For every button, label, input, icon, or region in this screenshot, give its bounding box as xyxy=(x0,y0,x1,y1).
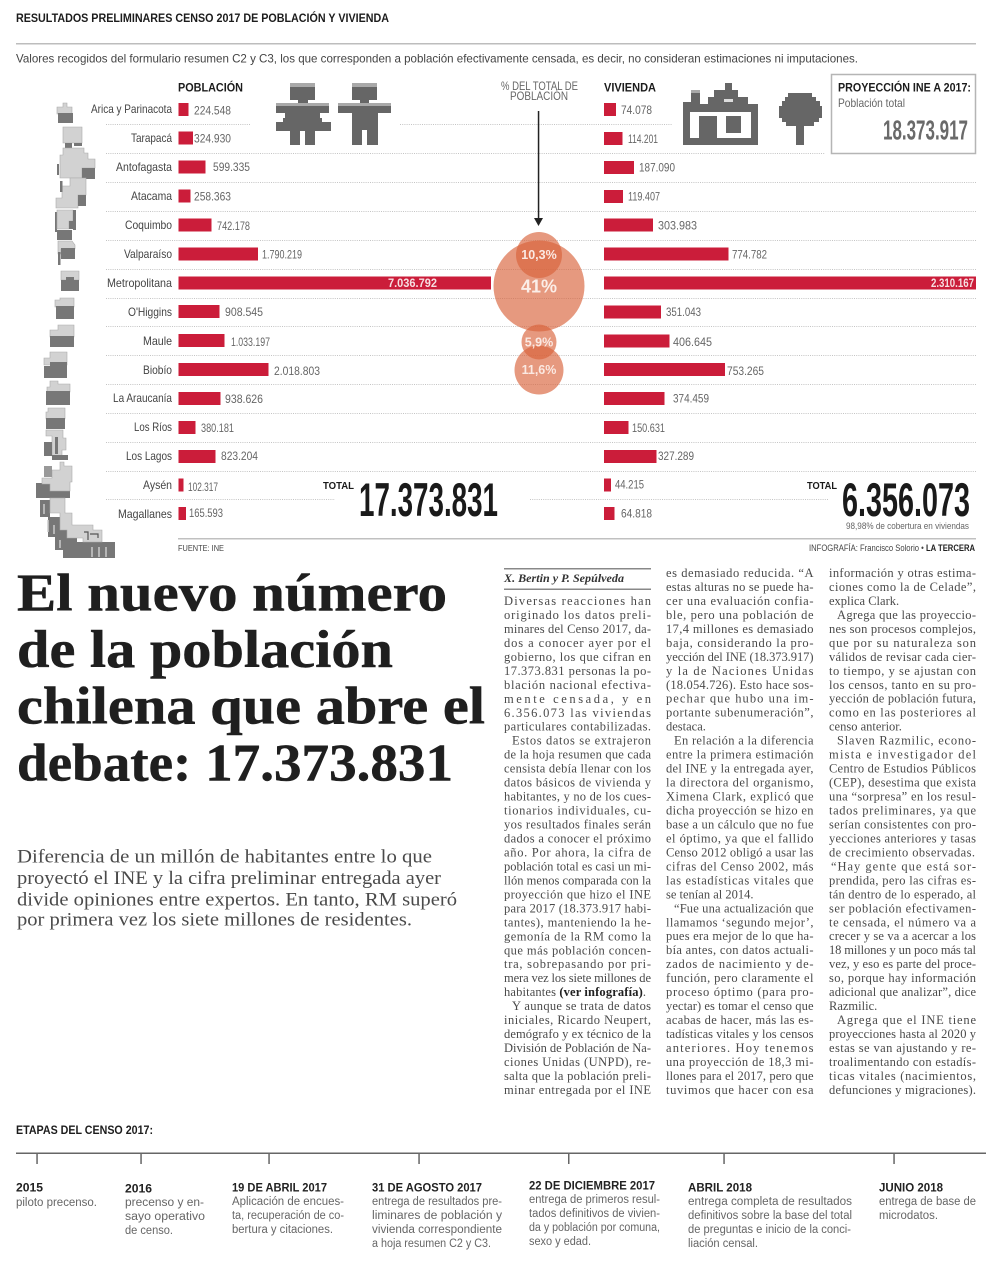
row: vivienda Los Lagos: 327.289 xyxy=(658,449,694,463)
timeline item: abril 2018: entrega completa de resultados xyxy=(688,1196,852,1208)
row: vivienda Antofagasta xyxy=(604,160,675,174)
row: Aysén: 102.317 xyxy=(188,480,218,494)
article column 1: 6.356.073 las viviendas xyxy=(504,706,651,720)
article column 1: censista debía llenar con los xyxy=(504,762,651,776)
article column 1: originado los datos preli- xyxy=(504,608,651,622)
row: Los Lagos: Los Lagos xyxy=(126,449,172,463)
row: Maule: 1.033.197 xyxy=(231,335,270,349)
deck xyxy=(17,848,457,931)
row: vivienda Coquimbo xyxy=(604,218,697,232)
top heading: RESULTADOS PRELIMINARES CENSO 2017 DE POBLACIÓN Y VIVIENDA xyxy=(16,12,389,25)
timeline item: 2016: sayo operativo xyxy=(125,1211,205,1223)
row: vivienda Arica y Parinacota xyxy=(604,103,652,117)
timeline item: junio 2018: microdatos. xyxy=(879,1210,938,1222)
deck: Diferencia de un millón de habitantes entre lo que xyxy=(17,848,432,868)
headline: debate: 17.373.831 xyxy=(17,734,453,792)
article column 1: dados a conocer el próximo xyxy=(504,832,651,846)
timeline item: junio 2018: entrega de base de xyxy=(879,1196,976,1208)
box: INE projection xyxy=(832,74,976,154)
article column 1: habitantes, y no de los cues- xyxy=(504,790,651,804)
timeline item: 22 de diciembre 2017: entrega de primeros resul- xyxy=(529,1194,660,1206)
timeline item: 31 de agosto 2017: liminares de población y xyxy=(372,1210,502,1222)
row: Metropolitana: 7.036.792 xyxy=(388,278,437,290)
icon: tree xyxy=(779,93,822,145)
row: vivienda Biobío xyxy=(604,363,764,378)
total housing: 98,98% de cobertura en viviendas xyxy=(846,521,969,531)
article column 1: mera vez los siete millones de xyxy=(504,971,651,985)
article column 1: demógrafo y ex técnico de la xyxy=(504,1027,651,1041)
article column 3: adicional que analizar”, dice xyxy=(829,985,976,999)
headline xyxy=(17,565,485,792)
timeline item: 22 de diciembre 2017: tados definitivos de vivien- xyxy=(529,1208,660,1220)
headline: chilena que abre el xyxy=(17,677,485,735)
article column 3: Slaven Razmilic, econo- xyxy=(837,734,976,748)
article column 1: División de Población de Na- xyxy=(504,1041,651,1055)
article column 3: válidos de revisar cada cier- xyxy=(829,650,976,664)
article column 3: de crecimiento observadas. xyxy=(829,845,975,859)
deck: divide opiniones entre expertos. En tanto, RM superó xyxy=(17,890,457,910)
timeline axis xyxy=(16,1152,986,1164)
article column 2: dicha proyección se hizo en xyxy=(666,804,814,818)
timeline item: 22 de diciembre 2017 xyxy=(529,1178,660,1248)
article column 1: particulares contabilizadas. xyxy=(504,720,651,734)
row: vivienda Atacama xyxy=(604,190,660,204)
row: Antofagasta: 599.335 xyxy=(213,160,250,174)
row: Valparaíso: Valparaíso xyxy=(124,247,172,261)
article column 3: te censada, el número va a xyxy=(829,915,976,929)
row: Arica y Parinacota: 224.548 xyxy=(194,104,231,118)
timeline item: junio 2018: JUNIO 2018 xyxy=(879,1180,943,1194)
article column 1: tra, sobrepasando por pri- xyxy=(504,957,651,971)
article column 2: “Fue una actualización que xyxy=(674,901,814,915)
row: vivienda O'Higgins: 351.043 xyxy=(666,305,701,319)
timeline item: abril 2018: definitivos sobre la base del total xyxy=(688,1210,852,1222)
row: Aysén xyxy=(143,478,218,494)
timeline item: 22 de diciembre 2017: da y población por comuna, xyxy=(529,1222,660,1234)
timeline item: 22 de diciembre 2017: 22 DE DICIEMBRE 2017 xyxy=(529,1178,655,1192)
timeline item: junio 2018 xyxy=(879,1180,976,1222)
row: vivienda Magallanes xyxy=(604,506,652,520)
timeline item: 22 de diciembre 2017: sexo y edad. xyxy=(529,1236,591,1248)
article column 2: zados de nacimiento y de- xyxy=(666,957,814,971)
row: Biobío: Biobío xyxy=(143,363,172,377)
article column 2: En relación a la diferencia xyxy=(674,734,814,748)
timeline item: abril 2018: de preguntas e inicio de la conci- xyxy=(688,1224,851,1236)
label: percent of total population: POBLACIÓN xyxy=(510,90,568,103)
article column 1: yos resultados finales serán xyxy=(504,818,652,832)
row: vivienda Metropolitana xyxy=(604,276,976,290)
article column 2: acabas de hacer, más las es- xyxy=(666,1013,814,1027)
article column 1: ciones Unidas (UNPD), re- xyxy=(504,1055,651,1069)
article column 3: defunciones y migraciones). xyxy=(829,1083,976,1097)
credit: INFOGRAFÍA: Francisco Solorio • LA TERCERA xyxy=(809,543,975,553)
box: INE projection: PROYECCIÓN INE A 2017: xyxy=(838,82,971,94)
timeline item: 19 de abril 2017: 19 DE ABRIL 2017 xyxy=(232,1180,327,1194)
row: Arica y Parinacota xyxy=(91,102,231,118)
intro text: Valores recogidos del formulario resumen C2 y C3, los que corresponden a población efectivamente censada, es decir, no consideran estimaciones ni imputaciones. xyxy=(16,52,858,66)
row: vivienda Atacama: 119.407 xyxy=(628,190,660,204)
article column 3: troalimentando con estadís- xyxy=(829,1055,976,1069)
bubbles: percent of population: 41% xyxy=(521,276,557,296)
article column 3: (CEP), desestima que exista xyxy=(829,776,976,790)
article column 2: portante subenumeración”, xyxy=(666,706,814,720)
article column 3: que por su naturaleza son xyxy=(829,636,977,650)
row: La Araucanía xyxy=(113,391,263,406)
article column 2: Censo 2012 obligó a usar las xyxy=(666,845,814,859)
row: Los Ríos: Los Ríos xyxy=(134,420,172,434)
timeline item: 19 de abril 2017 xyxy=(232,1180,344,1236)
article column 2: función, pero claramente el xyxy=(666,971,814,985)
row: Atacama: Atacama xyxy=(131,189,172,203)
timeline item: 31 de agosto 2017: 31 DE AGOSTO 2017 xyxy=(372,1180,482,1194)
row: vivienda Coquimbo: 303.983 xyxy=(658,218,697,232)
bubbles: percent of population: 5,9% xyxy=(525,336,553,350)
article column 1: tionarios individuales, cu- xyxy=(504,804,651,818)
row: vivienda O'Higgins xyxy=(604,305,701,319)
timeline item: 2016: de censo. xyxy=(125,1225,173,1237)
timeline item: 2016 xyxy=(125,1182,205,1237)
timeline item: 31 de agosto 2017: vivienda correspondiente xyxy=(372,1224,502,1236)
row: Maule: Maule xyxy=(143,334,172,348)
timeline item: abril 2018: ABRIL 2018 xyxy=(688,1180,752,1194)
row: Coquimbo: Coquimbo xyxy=(125,218,172,232)
row: vivienda Magallanes: 64.818 xyxy=(621,506,652,520)
row: Magallanes: Magallanes xyxy=(118,507,172,521)
map of Chile by regions xyxy=(36,103,115,558)
article column 3: nes son procesos complejos, xyxy=(829,622,976,636)
icon: house xyxy=(683,83,758,145)
row: vivienda Maule xyxy=(604,334,712,349)
article column 1: 17.373.831 personas la po- xyxy=(504,664,651,678)
article column 3: explica Clark. xyxy=(829,594,899,608)
article column 2: bía antes, con datos actuali- xyxy=(666,943,814,957)
timeline item: 2015: 2015 xyxy=(16,1180,43,1194)
row: Los Ríos: 380.181 xyxy=(201,421,234,435)
article column 3: proyecciones hasta al 2020 y xyxy=(829,1027,977,1041)
icon: man figure xyxy=(338,83,391,145)
article column 3: tán dentro de lo esperado, al xyxy=(829,887,977,901)
article column 1 xyxy=(504,594,652,1097)
total population: 17.373.831 xyxy=(359,474,498,527)
row: Magallanes xyxy=(118,506,223,521)
article column 2: entre la primera estimación xyxy=(666,748,814,762)
article column 2: pues era mejor de lo que ha- xyxy=(666,929,814,943)
icon: woman figure xyxy=(276,83,331,145)
row: Biobío xyxy=(143,363,320,378)
label: percent of total population: % DEL TOTAL DE xyxy=(501,81,578,93)
article column 2: llamamos ‘segundo mejor’, xyxy=(666,915,814,929)
total housing xyxy=(807,474,970,531)
article column 1: para 2017 (18.373.917 habi- xyxy=(504,901,651,915)
article column 2: (18.054.726). Esto hace sos- xyxy=(666,678,814,692)
article column 2: la directora del organismo, xyxy=(666,776,814,790)
timeline item: 2015 xyxy=(16,1180,97,1209)
article column 3: tados preliminares, ya que xyxy=(829,804,976,818)
article column 3: yección de población futura, xyxy=(829,692,976,706)
row: O'Higgins xyxy=(128,305,263,319)
article column 2: cifras del Censo 2002, más xyxy=(666,859,814,873)
row: Coquimbo xyxy=(125,218,250,233)
article column 2: es demasiado reducida. “A xyxy=(666,566,814,580)
row: vivienda Tarapacá: 114.201 xyxy=(628,132,658,146)
timeline item: abril 2018: liación censal. xyxy=(688,1238,758,1250)
row: Aysén: Aysén xyxy=(143,478,172,492)
row: vivienda Arica y Parinacota: 74.078 xyxy=(621,103,652,117)
article column 2: el óptimo, ya que el fallido xyxy=(666,831,814,845)
row: Antofagasta: Antofagasta xyxy=(116,160,172,174)
row: vivienda Aysén xyxy=(604,478,644,492)
row: Arica y Parinacota: Arica y Parinacota xyxy=(91,102,172,116)
column heading: vivienda: VIVIENDA xyxy=(604,82,656,94)
row: vivienda Metropolitana: 2.310.167 xyxy=(931,278,974,290)
article column 3: ser población efectivamen- xyxy=(829,901,976,915)
article column 2: se tenían al 2014. xyxy=(666,887,753,901)
article column 3: crecer y se va a acercar a los xyxy=(829,929,976,943)
article column 3: vez, y eso es parte del proce- xyxy=(829,957,976,971)
article column 1: gemonía de la RM como la xyxy=(504,929,651,943)
row: Atacama xyxy=(131,189,231,204)
article column 2: y la de Naciones Unidas xyxy=(666,664,814,678)
article column 1: Diversas reacciones han xyxy=(504,594,652,608)
article column 1: habitantes (ver infografía). xyxy=(504,985,646,999)
article column 3: mista e investigador del xyxy=(829,748,977,762)
article column 2: 17,4 millones es demasiado xyxy=(666,622,814,636)
article column 3: Razmilic. xyxy=(829,999,877,1013)
row: Valparaíso xyxy=(124,247,302,262)
article column 2: estas alturas no se puede ha- xyxy=(666,580,814,594)
bubbles: percent of population: 10,3% xyxy=(521,248,557,262)
column heading: población: POBLACIÓN xyxy=(178,82,243,94)
arrow to bubbles xyxy=(534,111,543,226)
timeline heading: ETAPAS DEL CENSO 2017: xyxy=(16,1125,153,1137)
article column 1: Estos datos se extrajeron xyxy=(512,734,652,748)
article column 2: las estadísticas vitales que xyxy=(666,873,814,887)
timeline item: 2016: 2016 xyxy=(125,1182,152,1196)
timeline item: abril 2018 xyxy=(688,1180,852,1250)
article column 3: yecciones anteriores y tasas xyxy=(829,831,976,845)
article column 1: gobierno, los que cifran en xyxy=(504,650,652,664)
article column 2: Ximena Clark, explicó que xyxy=(666,790,814,804)
article column 2: anteriores. Hoy tenemos xyxy=(666,1041,814,1055)
article column 1: año. Por ahora, la cifra de xyxy=(504,846,651,860)
row: Antofagasta xyxy=(116,160,250,174)
total population: TOTAL xyxy=(323,480,355,492)
article column 1: minar entregada por el INE xyxy=(504,1083,651,1097)
timeline item: 31 de agosto 2017 xyxy=(372,1180,502,1250)
row: vivienda La Araucanía: 374.459 xyxy=(673,392,709,406)
row: Metropolitana xyxy=(107,276,491,290)
deck: por primera vez los siete millones de residentes. xyxy=(17,911,412,931)
article column 3: los censos, tanto en su pro- xyxy=(829,678,976,692)
article column 2: base a un cálculo que no fue xyxy=(666,818,814,832)
row: vivienda Valparaíso xyxy=(604,248,767,262)
article column 3: censo anterior. xyxy=(829,720,902,734)
row: vivienda Valparaíso: 774.782 xyxy=(732,248,767,262)
timeline item: 19 de abril 2017: ta, recuperación de co- xyxy=(232,1210,344,1222)
article column 3: 18 millones y un poco más tal xyxy=(829,943,977,957)
article column 1: de la hoja resumen que cada xyxy=(504,748,651,762)
article column 1: blación nacional efectiva- xyxy=(504,678,651,692)
box: INE projection: Población total xyxy=(838,96,905,110)
article column 3: to tiempo, y se ajustan con xyxy=(829,664,977,678)
article column 3: ciones como la de Celade”, xyxy=(829,580,976,594)
label: percent of total population xyxy=(501,81,578,103)
article column 2: baja, considerando la pro- xyxy=(666,636,814,650)
housing bars by region xyxy=(604,103,976,520)
article column 3: prendida, pero las cifras es- xyxy=(829,873,976,887)
article column 2: yectar) es tomar el censo que xyxy=(666,999,814,1013)
row: Biobío: 2.018.803 xyxy=(274,364,320,378)
timeline item: 31 de agosto 2017: a hoja resumen C2 y C3. xyxy=(372,1238,491,1250)
article column 3: información y otras estima- xyxy=(829,566,976,580)
article column 2: cer una evaluación confia- xyxy=(666,594,814,608)
article column 3: ticas vitales (nacimientos, xyxy=(829,1069,976,1083)
article column 2 xyxy=(666,566,814,1097)
row: vivienda Los Ríos xyxy=(604,421,665,435)
article column 1: población total es casi un mi- xyxy=(504,859,651,873)
row: vivienda Maule: 406.645 xyxy=(673,335,712,349)
timeline item: 2015: piloto precenso. xyxy=(16,1197,97,1209)
row: Tarapacá xyxy=(131,131,231,146)
row: Metropolitana: Metropolitana xyxy=(107,276,172,290)
row: vivienda Antofagasta: 187.090 xyxy=(639,160,675,174)
row: vivienda Biobío: 753.265 xyxy=(727,364,764,378)
row: Coquimbo: 742.178 xyxy=(217,219,250,233)
timeline item: 19 de abril 2017: bertura y citaciones. xyxy=(232,1224,333,1236)
timeline item: 31 de agosto 2017: entrega de resultados pre- xyxy=(372,1196,502,1208)
byline: X. Bertin y P. Sepúlveda xyxy=(503,571,624,585)
article column 2: yección del INE (18.373.917) xyxy=(666,650,814,664)
article column 1: mente censada, y en xyxy=(504,692,652,706)
source: FUENTE: INE xyxy=(178,543,224,553)
article column 3: estas se van ajustando y re- xyxy=(829,1041,976,1055)
row: Tarapacá: Tarapacá xyxy=(131,131,172,145)
article column 2: tadísticas vitales y los censos xyxy=(666,1027,814,1041)
headline: El nuevo número xyxy=(17,565,447,623)
row: vivienda La Araucanía xyxy=(604,392,709,406)
total housing: TOTAL xyxy=(807,480,838,492)
article column 2: tuvimos que hacer con esa xyxy=(666,1083,814,1097)
bubbles: percent of population: 11,6% xyxy=(522,363,556,377)
total population xyxy=(323,474,498,527)
row: vivienda Tarapacá xyxy=(604,132,658,146)
article column 2: destaca. xyxy=(666,720,706,734)
row: La Araucanía: 938.626 xyxy=(225,392,263,406)
article column 1: salta que la población preli- xyxy=(504,1069,651,1083)
article column 3: Agrega que las proyeccio- xyxy=(837,608,976,622)
article column 2: ble, pero una población de xyxy=(666,608,814,622)
article column 2: del INE y la entregada ayer, xyxy=(666,762,814,776)
row: vivienda Los Lagos xyxy=(604,449,694,463)
article column 3: una “sorpresa” en los resul- xyxy=(829,790,976,804)
article column 1: proyección que hizo el INE xyxy=(504,887,651,901)
timeline item: 19 de abril 2017: Aplicación de encues- xyxy=(232,1196,344,1208)
headline: de la población xyxy=(17,621,393,679)
article column 3: Centro de Estudios Públicos xyxy=(829,762,976,776)
article column 3 xyxy=(829,566,977,1097)
row: Los Lagos: 823.204 xyxy=(221,449,258,463)
article column 2: pechar que hubo una im- xyxy=(666,692,814,706)
row: vivienda Aysén: 44.215 xyxy=(615,478,644,492)
article column 1: Y aunque se trata de datos xyxy=(512,999,651,1013)
article column 1: minares del Censo 2017, da- xyxy=(504,622,651,636)
article column 1: llón menos comparada con la xyxy=(504,873,651,887)
deck: proyectó el INE y la cifra preliminar entregada ayer xyxy=(17,869,441,889)
row: Atacama: 258.363 xyxy=(194,190,231,204)
row: O'Higgins: O'Higgins xyxy=(128,305,172,319)
row: vivienda Los Ríos: 150.631 xyxy=(632,421,665,435)
row: Maule xyxy=(143,334,270,349)
article column 3: como en las posteriores al xyxy=(829,706,977,720)
timeline item: 2016: precenso y en- xyxy=(125,1197,204,1209)
row: Los Ríos xyxy=(134,420,234,435)
population bars by region xyxy=(91,102,491,521)
row: O'Higgins: 908.545 xyxy=(225,305,263,319)
article column 3: “Hay gente que está sor- xyxy=(831,859,976,873)
article column 1: iniciales, Ricardo Neupert, xyxy=(504,1013,651,1027)
article column 1: datos básicos de vivienda y xyxy=(504,776,652,790)
article column 2: llones para el 2017, pero que xyxy=(666,1069,814,1083)
article column 2: una proyección de 18,3 mi- xyxy=(666,1055,814,1069)
bubbles: percent of population xyxy=(494,232,584,394)
article column 3: serían consistentes con pro- xyxy=(829,818,976,832)
article column 2: proceso óptimo (para pro- xyxy=(666,985,814,999)
row: Valparaíso: 1.790.219 xyxy=(262,248,302,262)
article column 3: so, porque hay información xyxy=(829,971,977,985)
row: Los Lagos xyxy=(126,449,258,463)
row: Magallanes: 165.593 xyxy=(189,506,223,520)
article column 1: dos a conocer ayer por el xyxy=(504,636,652,650)
article column 3: Agrega que el INE tiene xyxy=(837,1013,976,1027)
row: Tarapacá: 324.930 xyxy=(194,132,231,146)
article column 1: que más población concen- xyxy=(504,943,651,957)
row: La Araucanía: La Araucanía xyxy=(113,391,172,405)
article column 1: tantes), manteniendo la he- xyxy=(504,915,651,929)
